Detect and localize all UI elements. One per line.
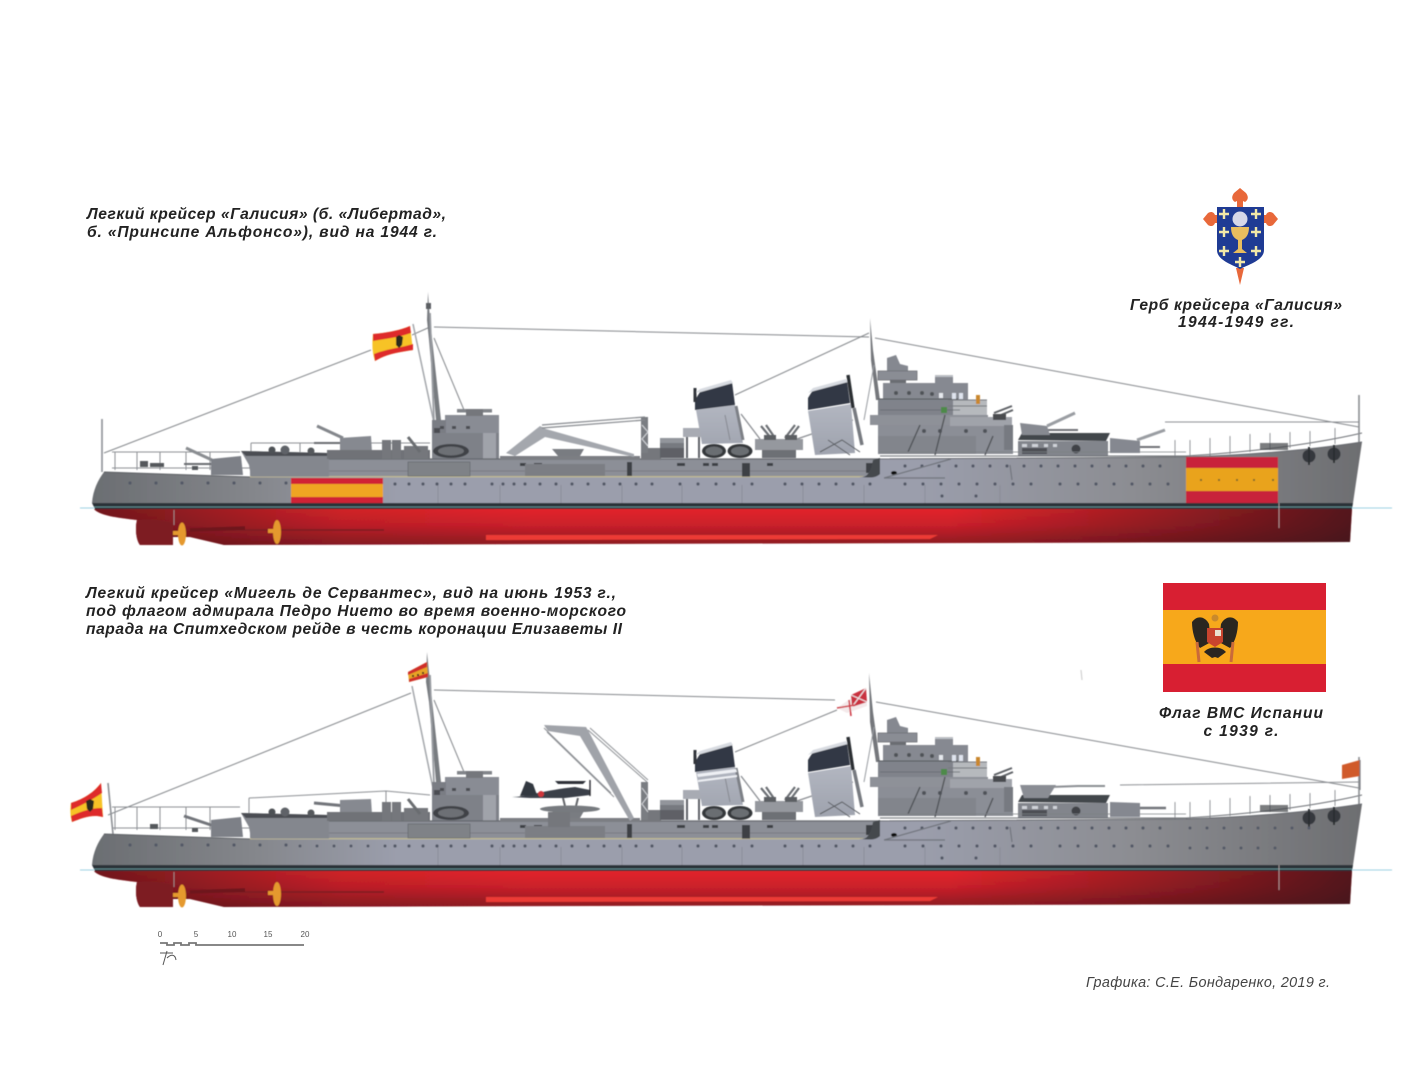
ship: Miguel de Cervantes 1953 <box>70 652 1392 908</box>
superfiring aft gun <box>314 426 372 452</box>
superfiring aft gun <box>314 799 372 814</box>
scale bar: 10 <box>228 930 237 939</box>
funnel stripes <box>697 769 737 782</box>
aft gun mount <box>184 448 243 475</box>
scale bar: 5 <box>194 930 199 939</box>
title: Miguel de Cervantes: Легкий крейсер «Мигель де Сервантес», вид на июнь 1953 г., <box>85 585 616 602</box>
scale bar: 0 <box>158 930 163 939</box>
aft gun mount <box>184 816 243 837</box>
title: Miguel de Cervantes <box>85 585 626 638</box>
title: Galicia: б. «Принсипе Альфонсо»), вид на 1944 г. <box>87 224 437 241</box>
icon: Spanish Navy flag since 1939 <box>1163 583 1326 692</box>
caption: Navy flag: с 1939 г. <box>1204 723 1278 740</box>
caption: Navy flag: Флаг ВМС Испании <box>1159 705 1323 722</box>
title: Galicia <box>86 206 446 241</box>
ship: Galicia 1944 <box>80 292 1392 546</box>
flag: British white ensign <box>837 688 867 716</box>
scale bar: 15 <box>264 930 273 939</box>
caption: coat of arms: 1944-1949 гг. <box>1178 314 1294 331</box>
title: Miguel de Cervantes: парада на Спитхедском рейде в честь коронации Елизаветы II <box>86 621 623 638</box>
hull and superstructure <box>80 355 1392 546</box>
crane raised <box>544 725 648 821</box>
forward guns <box>1020 413 1165 453</box>
rigging <box>104 324 1359 453</box>
stern deck fittings <box>140 461 198 470</box>
title: Galicia: Легкий крейсер «Галисия» (б. «Либертад», <box>86 206 446 223</box>
flag: stern ensign <box>372 326 413 361</box>
flag: jack on bow <box>1342 760 1360 790</box>
seaplane <box>512 780 600 827</box>
crane folded <box>506 417 648 457</box>
title: Miguel de Cervantes: под флагом адмирала Педро Нието во время военно-морского <box>86 603 626 620</box>
flag on hull: bow <box>1186 457 1278 503</box>
flag on hull: stern <box>291 478 383 503</box>
main mast <box>426 292 441 423</box>
flag: stern ensign <box>70 783 103 822</box>
icon: coat of arms of cruiser Galicia <box>1203 188 1278 285</box>
credit: Графика: С.Е. Бондаренко, 2019 г. <box>1086 975 1330 991</box>
extra portholes <box>300 828 1320 848</box>
flag: admiral's flag on main mast <box>408 662 428 682</box>
forward guns <box>1020 785 1166 817</box>
rigging <box>108 686 1359 815</box>
fore mast <box>864 318 880 420</box>
rails <box>108 782 1359 834</box>
hull and superstructure <box>80 717 1392 908</box>
fore mast <box>864 673 880 782</box>
caption: Navy flag <box>1159 705 1323 740</box>
caption: coat of arms: Герб крейсера «Галисия» <box>1130 297 1342 314</box>
caption: coat of arms <box>1130 297 1342 331</box>
stern staff and rails <box>102 419 1359 472</box>
scale bar <box>158 930 310 965</box>
main mast <box>426 652 441 785</box>
stern deck fittings <box>150 824 198 832</box>
scale bar: 20 <box>301 930 310 939</box>
